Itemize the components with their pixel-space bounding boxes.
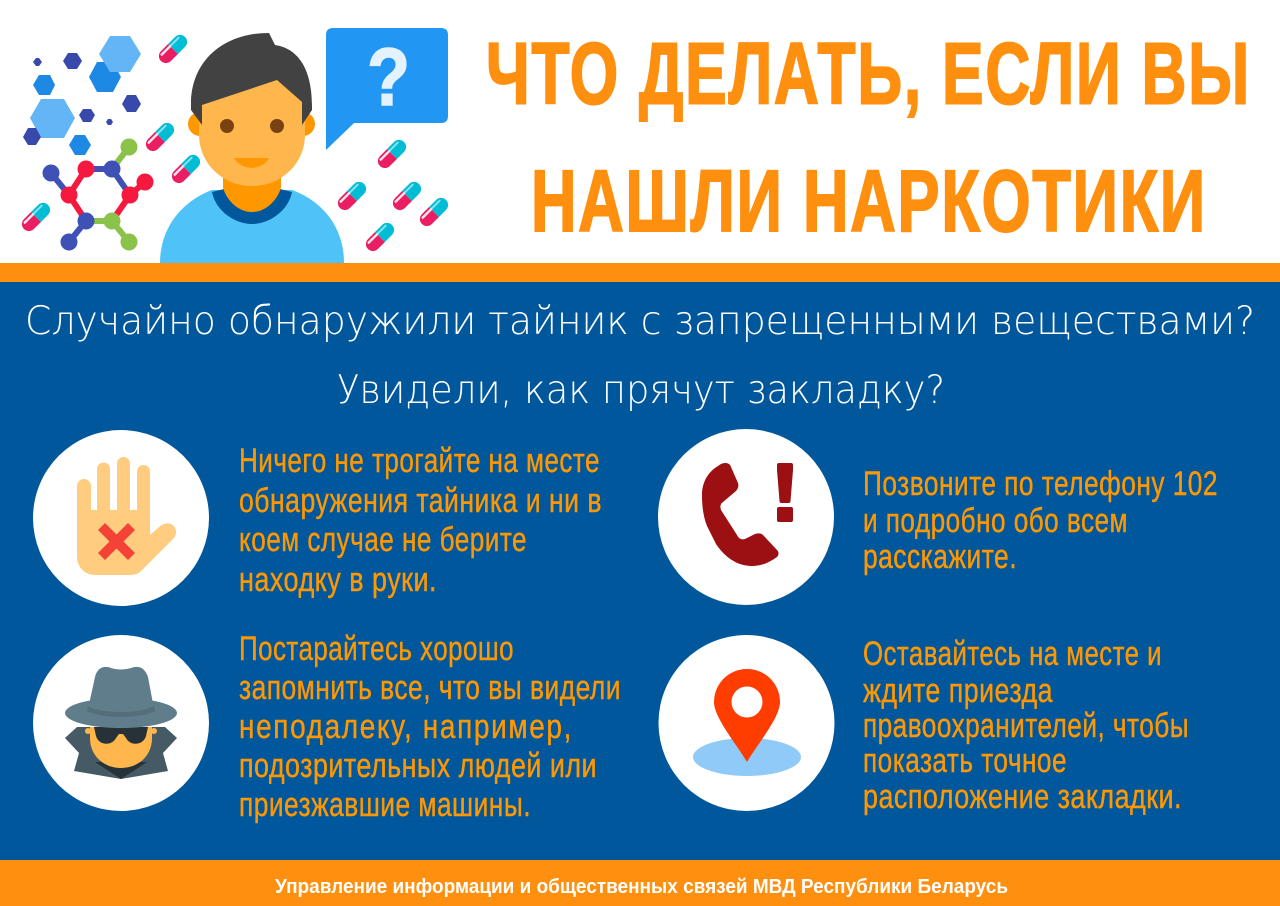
icon: molecule bbox=[42, 138, 154, 250]
text: remember: приезжавшие машины. bbox=[239, 786, 531, 824]
text: stay at the scene: правоохранителей, чтобы bbox=[863, 707, 1189, 745]
text: stay at the scene bbox=[863, 635, 1189, 816]
icon: stop hand bbox=[33, 430, 209, 606]
icon: spy bbox=[33, 635, 209, 811]
subtitle bbox=[25, 299, 1255, 413]
text: do not touch: Ничего не трогайте на месте bbox=[239, 442, 600, 480]
text: stay at the scene: показать точное bbox=[863, 742, 1067, 780]
icon: hexagons bbox=[23, 36, 141, 155]
text: stay at the scene: ждите приезда bbox=[863, 672, 1053, 710]
text: do not touch: коем случае не берите bbox=[239, 521, 527, 559]
icon: capsules bbox=[19, 32, 451, 254]
text: call 102: и подробно обо всем bbox=[863, 502, 1128, 540]
text: call 102 bbox=[863, 465, 1218, 576]
footer band bbox=[0, 860, 1280, 906]
text: remember: подозрительных людей или bbox=[239, 747, 597, 785]
icon: location pin bbox=[658, 635, 834, 811]
top orange band bbox=[0, 263, 1280, 282]
title bbox=[486, 26, 1251, 250]
text: do not touch: обнаружения тайника и ни в bbox=[239, 482, 602, 520]
text: remember: запомнить все, что вы видели bbox=[239, 669, 621, 707]
icon: phone with exclamation bbox=[658, 429, 834, 605]
subtitle: Увидели, как прячут закладку? bbox=[337, 368, 945, 413]
text: do not touch bbox=[239, 442, 602, 599]
text: stay at the scene: Оставайтесь на месте и bbox=[863, 635, 1162, 673]
subtitle: Случайно обнаружили тайник с запрещенными веществами? bbox=[25, 299, 1255, 344]
text: do not touch: находку в руки. bbox=[239, 561, 437, 599]
text: call 102: расскажите. bbox=[863, 538, 1017, 576]
icon: speech bubble with question mark: ? bbox=[367, 32, 410, 123]
main blue panel bbox=[0, 282, 1280, 860]
icon: speech bubble with question mark bbox=[326, 28, 448, 150]
icon: person bbox=[160, 33, 344, 263]
text: remember bbox=[239, 630, 621, 824]
header background bbox=[0, 0, 1280, 263]
text: stay at the scene: расположение закладки. bbox=[863, 778, 1182, 816]
footer text: Управление информации и общественных связей МВД Республики Беларусь bbox=[275, 876, 1008, 898]
text: remember: Постарайтесь хорошо bbox=[239, 630, 514, 668]
text: remember: неподалеку, например, bbox=[239, 708, 573, 746]
